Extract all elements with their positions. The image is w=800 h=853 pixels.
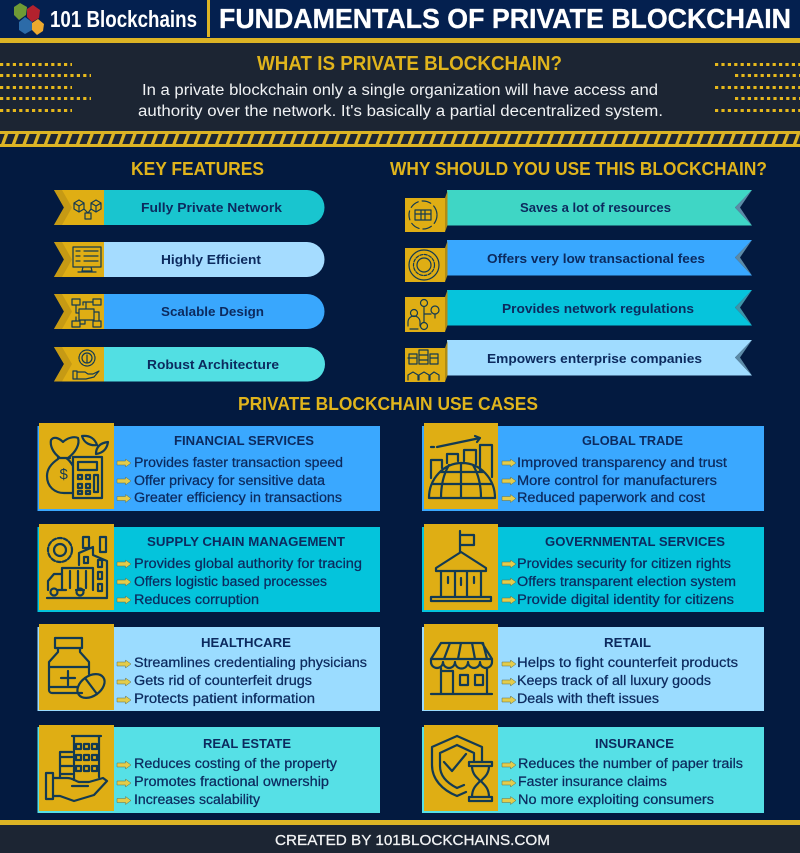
icon: building in hand	[46, 736, 107, 801]
heading: REAL ESTATE	[203, 736, 291, 751]
feature: scalable design: Scalable Design	[161, 304, 264, 319]
card: retail	[422, 624, 764, 711]
list	[502, 756, 743, 807]
list	[502, 455, 727, 505]
card: healthcare	[38, 624, 380, 711]
heading: RETAIL	[604, 635, 651, 650]
description text: In a private blockchain only a single organization will have access and	[142, 82, 658, 99]
feature: fully private network	[54, 190, 325, 225]
reason: network regulations: Provides network regulations	[502, 301, 694, 316]
icon: shield and hourglass	[432, 736, 492, 801]
logo: 101 Blockchains: 101 Blockchains	[50, 6, 197, 32]
card: global trade	[422, 423, 764, 511]
list: Protects patient information	[134, 691, 315, 706]
header bar	[0, 0, 800, 43]
footer: CREATED BY 101BLOCKCHAINS.COM	[275, 832, 550, 849]
list: Offers transparent election system	[517, 574, 736, 589]
list: Streamlines credentialing physicians	[134, 655, 367, 670]
icon: money bag and calculator: $	[60, 466, 68, 483]
heading: HEALTHCARE	[201, 635, 291, 650]
icon: government building	[431, 531, 491, 601]
heading: GOVERNMENTAL SERVICES	[545, 534, 725, 549]
icon: globe and growth	[429, 436, 495, 498]
feature: highly efficient: Highly Efficient	[161, 252, 262, 267]
list: Increases scalability	[134, 792, 260, 807]
reason: low fees: Offers very low transactional fees	[487, 251, 705, 266]
list: Improved transparency and trust	[517, 455, 727, 470]
heading: INSURANCE	[595, 736, 674, 751]
icon: factory and truck	[47, 537, 107, 598]
card: supply chain management	[38, 524, 380, 612]
heading: FINANCIAL SERVICES	[174, 433, 314, 448]
list: Offers logistic based processes	[134, 574, 327, 589]
heading: SUPPLY CHAIN MANAGEMENT	[147, 534, 345, 549]
list: Gets rid of counterfeit drugs	[134, 673, 312, 688]
title: FUNDAMENTALS OF PRIVATE BLOCKCHAIN	[219, 3, 791, 34]
list: Provides global authority for tracing	[134, 556, 362, 571]
icon: medicine bottle and pill	[49, 638, 109, 703]
list: Reduces corruption	[134, 592, 259, 607]
icon: gear cycle	[409, 250, 439, 280]
card: financial services	[38, 423, 380, 511]
footer	[0, 820, 800, 853]
reason: network regulations	[405, 290, 752, 332]
description text: authority over the network. It's basically a partial decentralized system.	[138, 103, 663, 120]
icon: monitor	[73, 247, 101, 272]
heading: what is private blockchain: WHAT IS PRIVATE BLOCKCHAIN?	[257, 53, 562, 75]
reason: low fees	[405, 240, 752, 282]
icon: enterprise team	[408, 350, 439, 380]
list	[117, 655, 367, 706]
list: Provides security for citizen rights	[517, 556, 731, 571]
list	[502, 655, 738, 706]
icon: people and checkpoints	[408, 300, 439, 330]
icon: gear and hand	[73, 350, 99, 379]
feature: scalable design	[54, 294, 325, 329]
list: Reduced paperwork and cost	[517, 490, 705, 505]
reason: empowers enterprise: Empowers enterprise companies	[487, 351, 702, 366]
list: Reduces the number of paper trails	[518, 756, 743, 771]
feature: fully private network: Fully Private Network	[141, 200, 283, 215]
heading: use cases: PRIVATE BLOCKCHAIN USE CASES	[238, 394, 538, 414]
list: Deals with theft issues	[517, 691, 659, 706]
icon: cubes	[74, 200, 101, 219]
list	[117, 556, 362, 607]
decorative dots right	[715, 64, 800, 110]
list: Keeps track of all luxury goods	[517, 673, 711, 688]
reason: saves resources	[405, 190, 752, 232]
description text	[138, 82, 663, 120]
icon: storefront	[431, 643, 492, 694]
list: Reduces costing of the property	[134, 756, 337, 771]
feature: robust architecture	[54, 347, 325, 382]
heading: why should you use this blockchain: WHY SHOULD YOU USE THIS BLOCKCHAIN?	[390, 159, 767, 179]
card: governmental services	[422, 524, 764, 612]
list: Offer privacy for sensitive data	[134, 473, 326, 488]
icon: box cycle	[409, 201, 437, 229]
reason: empowers enterprise	[405, 340, 752, 382]
icon: money bag and calculator	[47, 436, 108, 498]
list	[117, 756, 337, 807]
list: Provide digital identity for citizens	[517, 592, 734, 607]
list: Helps to fight counterfeit products	[517, 655, 738, 670]
card: real estate	[38, 725, 380, 813]
logo: 101 Blockchains	[14, 3, 197, 35]
icon: scalable diagram	[72, 299, 101, 327]
feature: highly efficient	[54, 242, 325, 277]
list: Faster insurance claims	[518, 774, 667, 789]
heading: key features: KEY FEATURES	[131, 159, 264, 179]
list: Greater efficiency in transactions	[134, 490, 342, 505]
list: Provides faster transaction speed	[134, 455, 343, 470]
reason: saves resources: Saves a lot of resources	[520, 200, 671, 215]
list: Promotes fractional ownership	[134, 774, 329, 789]
panel: what is private blockchain	[0, 43, 800, 131]
hatched divider	[0, 131, 800, 147]
feature: robust architecture: Robust Architecture	[147, 357, 279, 372]
heading: GLOBAL TRADE	[582, 433, 683, 448]
list	[502, 556, 736, 607]
list: No more exploiting consumers	[518, 792, 714, 807]
decorative dots left	[0, 64, 91, 110]
card: insurance	[422, 725, 764, 813]
list: More control for manufacturers	[517, 473, 717, 488]
list	[117, 455, 343, 505]
